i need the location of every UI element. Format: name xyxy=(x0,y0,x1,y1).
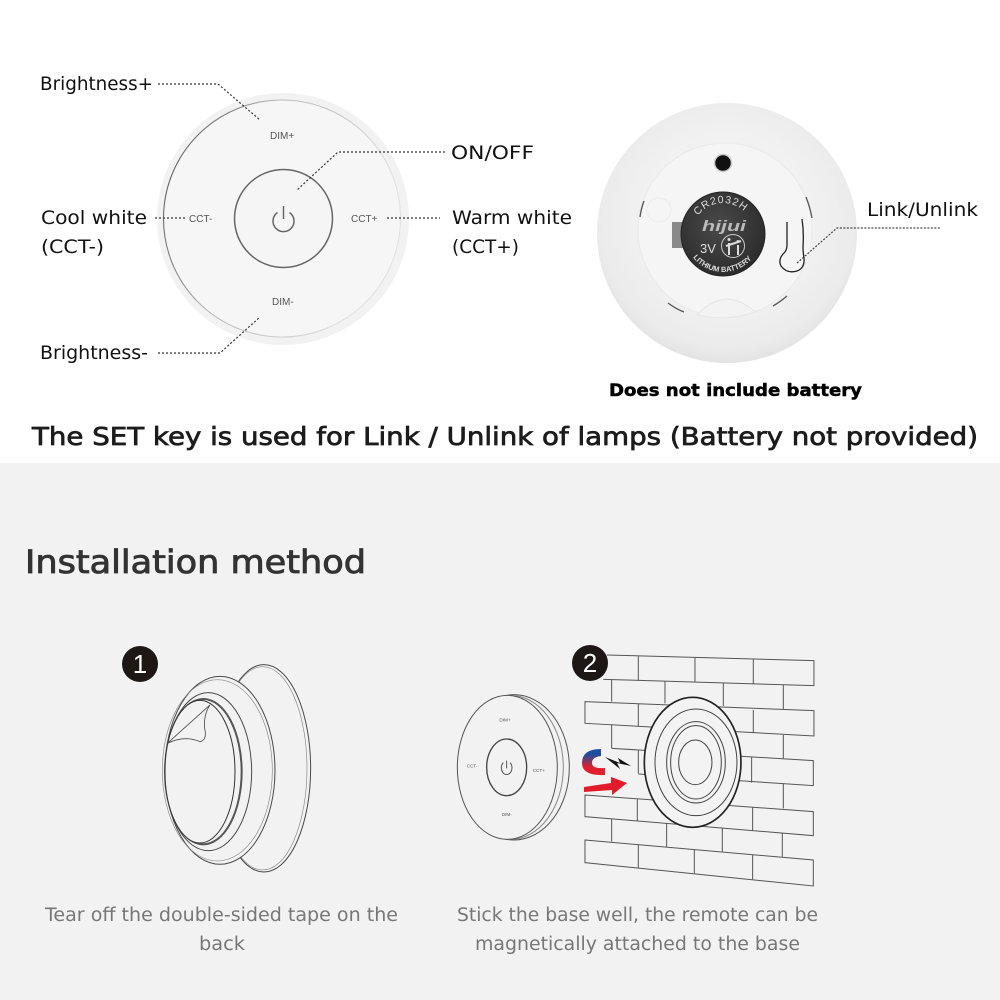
illustration: remote front xyxy=(457,695,569,840)
label: Brightness+: Brightness+ xyxy=(40,73,153,95)
illustration: remote front: DIM- xyxy=(502,812,512,817)
label: Brightness-: Brightness- xyxy=(40,342,148,364)
heading: Installation method: Installation method xyxy=(25,543,366,581)
illustration: remote back with tape being peeled xyxy=(162,665,311,872)
badge 1: 1 xyxy=(133,649,147,679)
caption step 2: Stick the base well, the remote can be xyxy=(457,905,818,926)
remote front view: CCT- xyxy=(189,214,212,225)
SET key slot xyxy=(780,219,804,272)
illustration: magnetic base on wall xyxy=(644,697,741,827)
Link/Unlink leader xyxy=(797,228,940,263)
label: ON/OFF: ON/OFF xyxy=(451,142,534,164)
illustration: remote front: CCT- xyxy=(467,763,478,768)
illustration: remote front: CCT+ xyxy=(533,768,545,773)
remote front view: DIM- xyxy=(272,297,294,308)
CR2032H coin battery: 3V xyxy=(700,241,716,256)
remote front view: CCT+ xyxy=(351,214,378,225)
label: Link/Unlink: Link/Unlink xyxy=(867,199,978,221)
heading: SET key note: The SET key is used for Link / Unlink of lamps (Battery not provided) xyxy=(31,422,978,451)
badge 2: 2 xyxy=(583,648,597,678)
badge 1 xyxy=(122,646,158,682)
panel: step 2 xyxy=(457,645,818,955)
label: Warm white (CCT+): Warm white xyxy=(452,207,572,229)
note: does not include battery: Does not include battery xyxy=(609,381,862,401)
icon: spark xyxy=(605,757,631,769)
CR2032H coin battery xyxy=(672,192,766,276)
label: Cool white (CCT-): Cool white xyxy=(41,207,147,229)
label: Warm white (CCT+): (CCT+) xyxy=(452,236,519,258)
remote front view: DIM+ xyxy=(270,131,294,142)
badge 2 xyxy=(572,645,608,681)
label: Cool white (CCT-): (CCT-) xyxy=(41,236,104,258)
CR2032H coin battery: CR2032H xyxy=(694,196,748,214)
label: Cool white (CCT-) xyxy=(41,207,147,258)
icon: red arrow xyxy=(584,777,627,795)
remote back shell xyxy=(597,103,857,363)
caption step 1 xyxy=(44,905,398,955)
illustration: remote front: DIM+ xyxy=(499,718,511,723)
remote front view xyxy=(157,93,409,345)
hole xyxy=(714,154,732,172)
brick wall xyxy=(585,655,814,886)
caption step 1: Tear off the double-sided tape on the xyxy=(44,905,398,926)
CR2032H coin battery: hijui xyxy=(702,218,747,235)
CR2032H coin battery: LITHIUM BATTERY xyxy=(693,254,750,272)
caption step 2: magnetically attached to the base xyxy=(475,934,800,955)
caption step 2 xyxy=(457,905,818,955)
panel: remote front with button labels xyxy=(40,73,572,364)
icon: magnet xyxy=(582,749,605,775)
caption step 1: back xyxy=(199,934,245,955)
panel: step 1 xyxy=(44,646,398,955)
leader lines xyxy=(155,84,445,353)
label: Warm white (CCT+) xyxy=(452,207,572,258)
background: lower installation panel xyxy=(0,463,1000,1000)
panel: remote back with battery xyxy=(597,103,978,363)
